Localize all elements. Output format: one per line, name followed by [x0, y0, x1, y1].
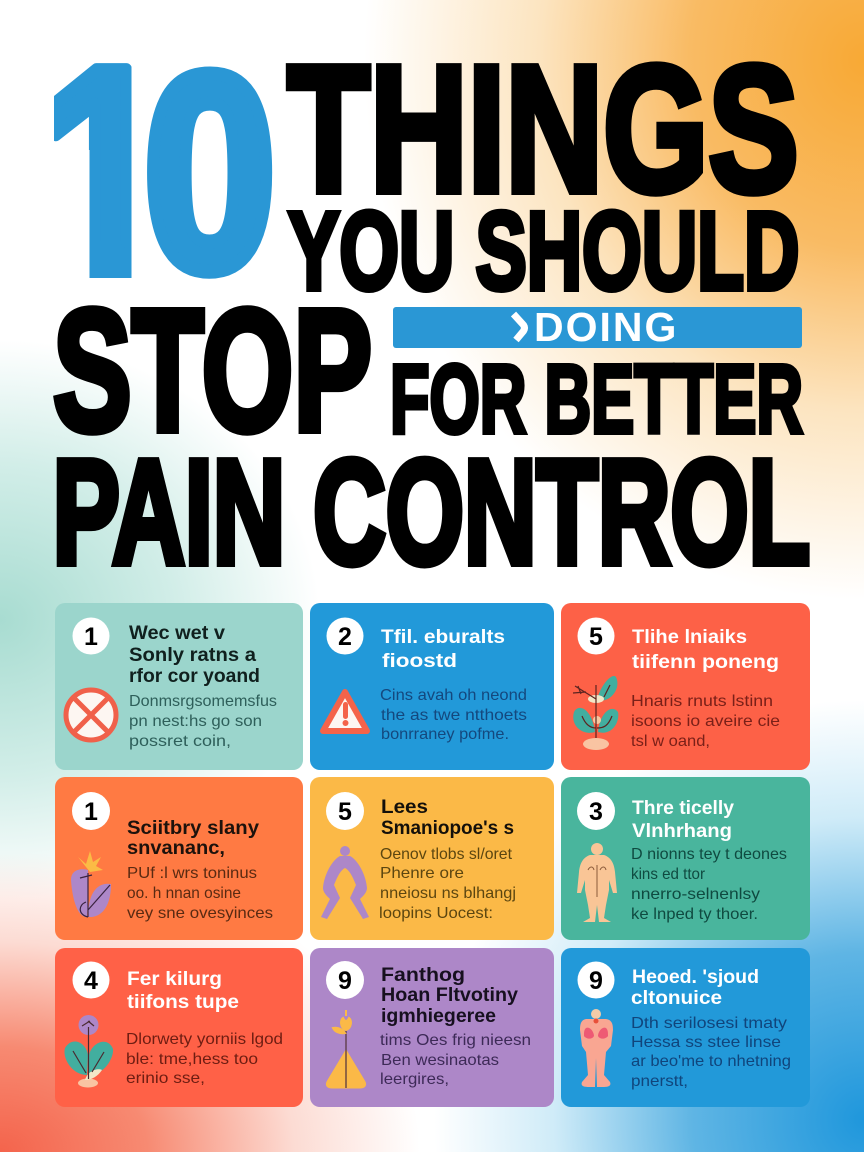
panel: card 6	[561, 777, 810, 940]
card 1 heading: Sonly ratns a	[129, 645, 256, 666]
panel: card 3	[561, 603, 810, 770]
card 2 body text: the as twe ntthoets	[381, 707, 527, 724]
card 7 heading: tiifons tupe	[127, 992, 239, 1013]
panel: card 8	[310, 948, 554, 1107]
card 6 heading: Vlnhrhang	[632, 821, 732, 842]
card 8 heading	[381, 965, 518, 1027]
card 2 heading: fioostd	[382, 651, 457, 672]
card 9 body text: Hessa ss stee linse	[631, 1034, 781, 1051]
card 1 body text: possret coin,	[129, 733, 231, 750]
card 5 heading: Lees	[381, 797, 428, 818]
card 7 heading: Fer kilurg	[127, 969, 222, 990]
icon: plant	[573, 676, 618, 750]
icon: yellow plant on cone	[326, 1010, 366, 1088]
card 1 heading: rfor cor yoand	[129, 666, 260, 687]
number badge 9	[326, 961, 364, 999]
card 4 body text: PUf :l wrs toninus	[127, 865, 257, 882]
card 4 heading: snvananc,	[127, 838, 225, 859]
icon: prohibited sign	[66, 690, 116, 740]
card 1 heading	[129, 623, 260, 687]
heading: THINGS: THINGS	[287, 28, 799, 229]
card 7 body text: erinio sse,	[126, 1070, 205, 1087]
panel: card 4	[55, 777, 303, 940]
card 4 heading: Sciitbry slany	[127, 818, 259, 839]
card 5 heading	[381, 797, 514, 839]
number badge 1: 1	[84, 623, 98, 651]
card 9 body text	[631, 1015, 791, 1090]
big digit 1: 1	[40, 8, 170, 334]
number badge 4: 4	[84, 967, 98, 995]
card 6 heading: Thre ticelly	[632, 798, 734, 819]
big digit 0: 0	[144, 17, 276, 329]
card 9 body text: Dth serilosesi tmaty	[631, 1015, 787, 1032]
card 8 body text: tims Oes frig nieesn	[380, 1032, 531, 1049]
card 3 body text	[631, 693, 780, 750]
card 5 body text: nneiosu ns blhangj	[380, 885, 516, 902]
card 6 body text: kins ed ttor	[631, 866, 706, 883]
card 5 body text: loopins Uocest:	[379, 905, 493, 922]
panel: card 5	[310, 777, 554, 940]
icon: flower	[71, 851, 111, 917]
number badge 9: 9	[338, 967, 352, 995]
icon: flower with leaves	[64, 1015, 113, 1088]
card 7 body text: ble: tme,hess too	[126, 1051, 258, 1068]
card 7 body text	[126, 1031, 283, 1087]
number badge 2: 2	[338, 623, 352, 651]
number badge 3	[577, 792, 615, 830]
card 6 body text	[631, 846, 787, 923]
card 6 body text: ke lnped ty thoer.	[631, 906, 758, 923]
card 3 body text: tsl w oand,	[631, 733, 710, 750]
card 5 body text: Oenov tlobs sl/oret	[380, 846, 513, 863]
panel: card 9	[561, 948, 810, 1107]
number badge 9: 9	[589, 967, 603, 995]
card 8 heading: Hoan Fltvotiny	[381, 985, 518, 1006]
icon: peach body figure	[577, 843, 617, 922]
card 6 heading	[632, 798, 734, 842]
card 4 body text: oo. h nnan osine	[127, 885, 241, 902]
number badge 5	[578, 618, 614, 654]
card 6 body text: nnerro-selnenlsy	[631, 886, 760, 903]
heading: FOR BETTER: FOR BETTER	[390, 344, 803, 454]
card 9 heading	[631, 967, 759, 1009]
panel: card 2	[310, 603, 554, 770]
card 2 body text: Cins avah oh neond	[380, 687, 527, 704]
card 4 body text: vey sne ovesyinces	[127, 905, 273, 922]
card 1 heading: Wec wet v	[129, 623, 225, 644]
card 9 heading: cltonuice	[631, 988, 722, 1009]
card 5 heading: Smaniopoe's s	[381, 818, 514, 839]
card 7 heading	[127, 969, 239, 1013]
card 1 body text	[129, 693, 277, 750]
number badge 3: 3	[589, 798, 603, 826]
card 9 body text: ar beo'me to nhetning	[631, 1053, 791, 1070]
number badge 4	[72, 962, 110, 998]
card 9 body text: pnerstt,	[631, 1073, 688, 1090]
card 9 heading: Heoed. 'sjoud	[632, 967, 759, 988]
heading: STOP: STOP	[53, 275, 372, 467]
card 8 body text: leergires,	[380, 1071, 449, 1088]
card 4 heading	[127, 818, 259, 859]
icon: warning triangle	[323, 692, 367, 731]
card 8 heading: igmhiegeree	[381, 1006, 496, 1027]
number badge 5: 5	[589, 623, 603, 651]
card 2 body text	[380, 687, 527, 743]
number badge 5	[326, 792, 364, 830]
card 7 body text: Dlorwety yorniis lgod	[126, 1031, 283, 1048]
card 6 body text: D nionns tey t deones	[631, 846, 787, 863]
number badge 1	[72, 618, 110, 654]
card 8 body text: Ben wesinaotas	[381, 1052, 499, 1069]
card 3 heading	[632, 627, 779, 673]
card 3 body text: isoons io aveire cie	[631, 713, 780, 730]
icon: purple figure	[321, 846, 369, 919]
panel: card 1	[55, 603, 303, 770]
card 2 heading: Tfil. eburalts	[381, 627, 505, 648]
heading: PAIN CONTROL: PAIN CONTROL	[53, 428, 810, 595]
card 2 heading	[381, 627, 505, 672]
number badge 1	[72, 792, 110, 830]
number badge 9	[578, 962, 614, 998]
number badge 2	[326, 618, 364, 654]
banner: DOING: DOING	[534, 304, 678, 350]
heading: YOU SHOULD: YOU SHOULD	[288, 190, 799, 313]
card 5 body text	[379, 846, 516, 922]
icon: pink body figure	[580, 1009, 613, 1087]
card 1 body text: pn nest:hs go son	[129, 713, 262, 730]
card 3 heading: tiifenn poneng	[632, 652, 779, 673]
card 4 body text	[127, 865, 273, 922]
card 5 body text: Phenre ore	[380, 865, 464, 882]
banner: DOING	[393, 304, 802, 350]
card 1 body text: Donmsrgsomemsfus	[129, 693, 277, 710]
number badge 1: 1	[84, 798, 98, 826]
card 2 body text: bonrraney pofme.	[381, 726, 509, 743]
card 8 heading: Fanthog	[381, 965, 465, 986]
card 3 body text: Hnaris rnuts lstinn	[631, 693, 773, 710]
panel: card 7	[55, 948, 303, 1107]
title	[53, 61, 810, 568]
card 3 heading: Tlihe lniaiks	[632, 627, 747, 648]
card 8 body text	[380, 1032, 531, 1088]
number badge 5: 5	[338, 798, 352, 826]
